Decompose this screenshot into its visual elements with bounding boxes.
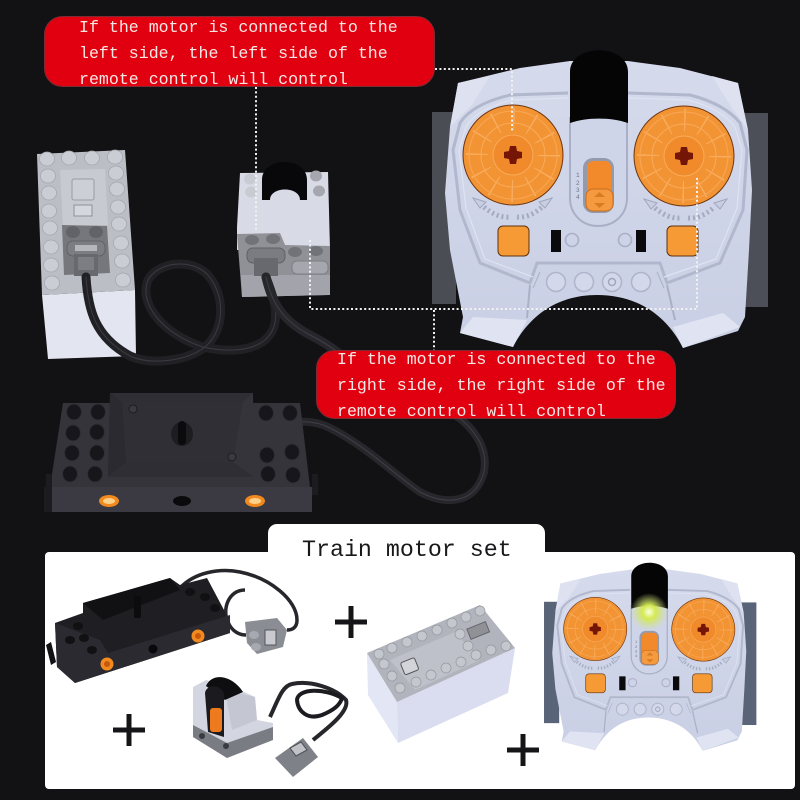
dark train motor xyxy=(44,393,318,512)
callout: right side: remote control will control xyxy=(337,402,606,421)
callout: right side xyxy=(316,350,676,421)
callout: left side: remote control will control xyxy=(79,70,348,89)
receiver small plug xyxy=(275,738,318,777)
plus xyxy=(335,606,367,638)
motor plug xyxy=(245,618,287,654)
dotted leader lines xyxy=(256,69,697,350)
callout: left side xyxy=(44,16,434,89)
plus xyxy=(113,714,145,746)
cable: battery to receiver xyxy=(86,264,340,361)
heading label: Train motor set xyxy=(302,537,512,563)
cable: motor to receiver, behind callout xyxy=(250,415,485,500)
callout: right side: If the motor is connected to the xyxy=(337,350,656,369)
heading label xyxy=(268,524,545,572)
callout: right side: right side, the right side of the xyxy=(337,376,666,395)
callout: left side: left side, the left side of the xyxy=(79,44,388,63)
set item: battery box xyxy=(367,605,515,743)
set item: receiver xyxy=(193,677,346,777)
battery box xyxy=(37,150,136,359)
set item: remote control xyxy=(544,563,756,751)
motor cap xyxy=(108,393,254,477)
remote glow xyxy=(630,593,668,631)
set item: train motor xyxy=(46,571,297,683)
motor pin xyxy=(171,421,193,446)
callout: left side: If the motor is connected to the xyxy=(79,18,398,37)
receiver lens xyxy=(262,162,307,200)
panel: train motor set xyxy=(45,552,795,789)
battery plug xyxy=(67,241,105,276)
plus xyxy=(507,734,539,766)
IR receiver xyxy=(237,162,330,297)
receiver plug xyxy=(247,248,328,276)
motor lights xyxy=(99,495,265,507)
remote control (large) xyxy=(432,50,768,348)
